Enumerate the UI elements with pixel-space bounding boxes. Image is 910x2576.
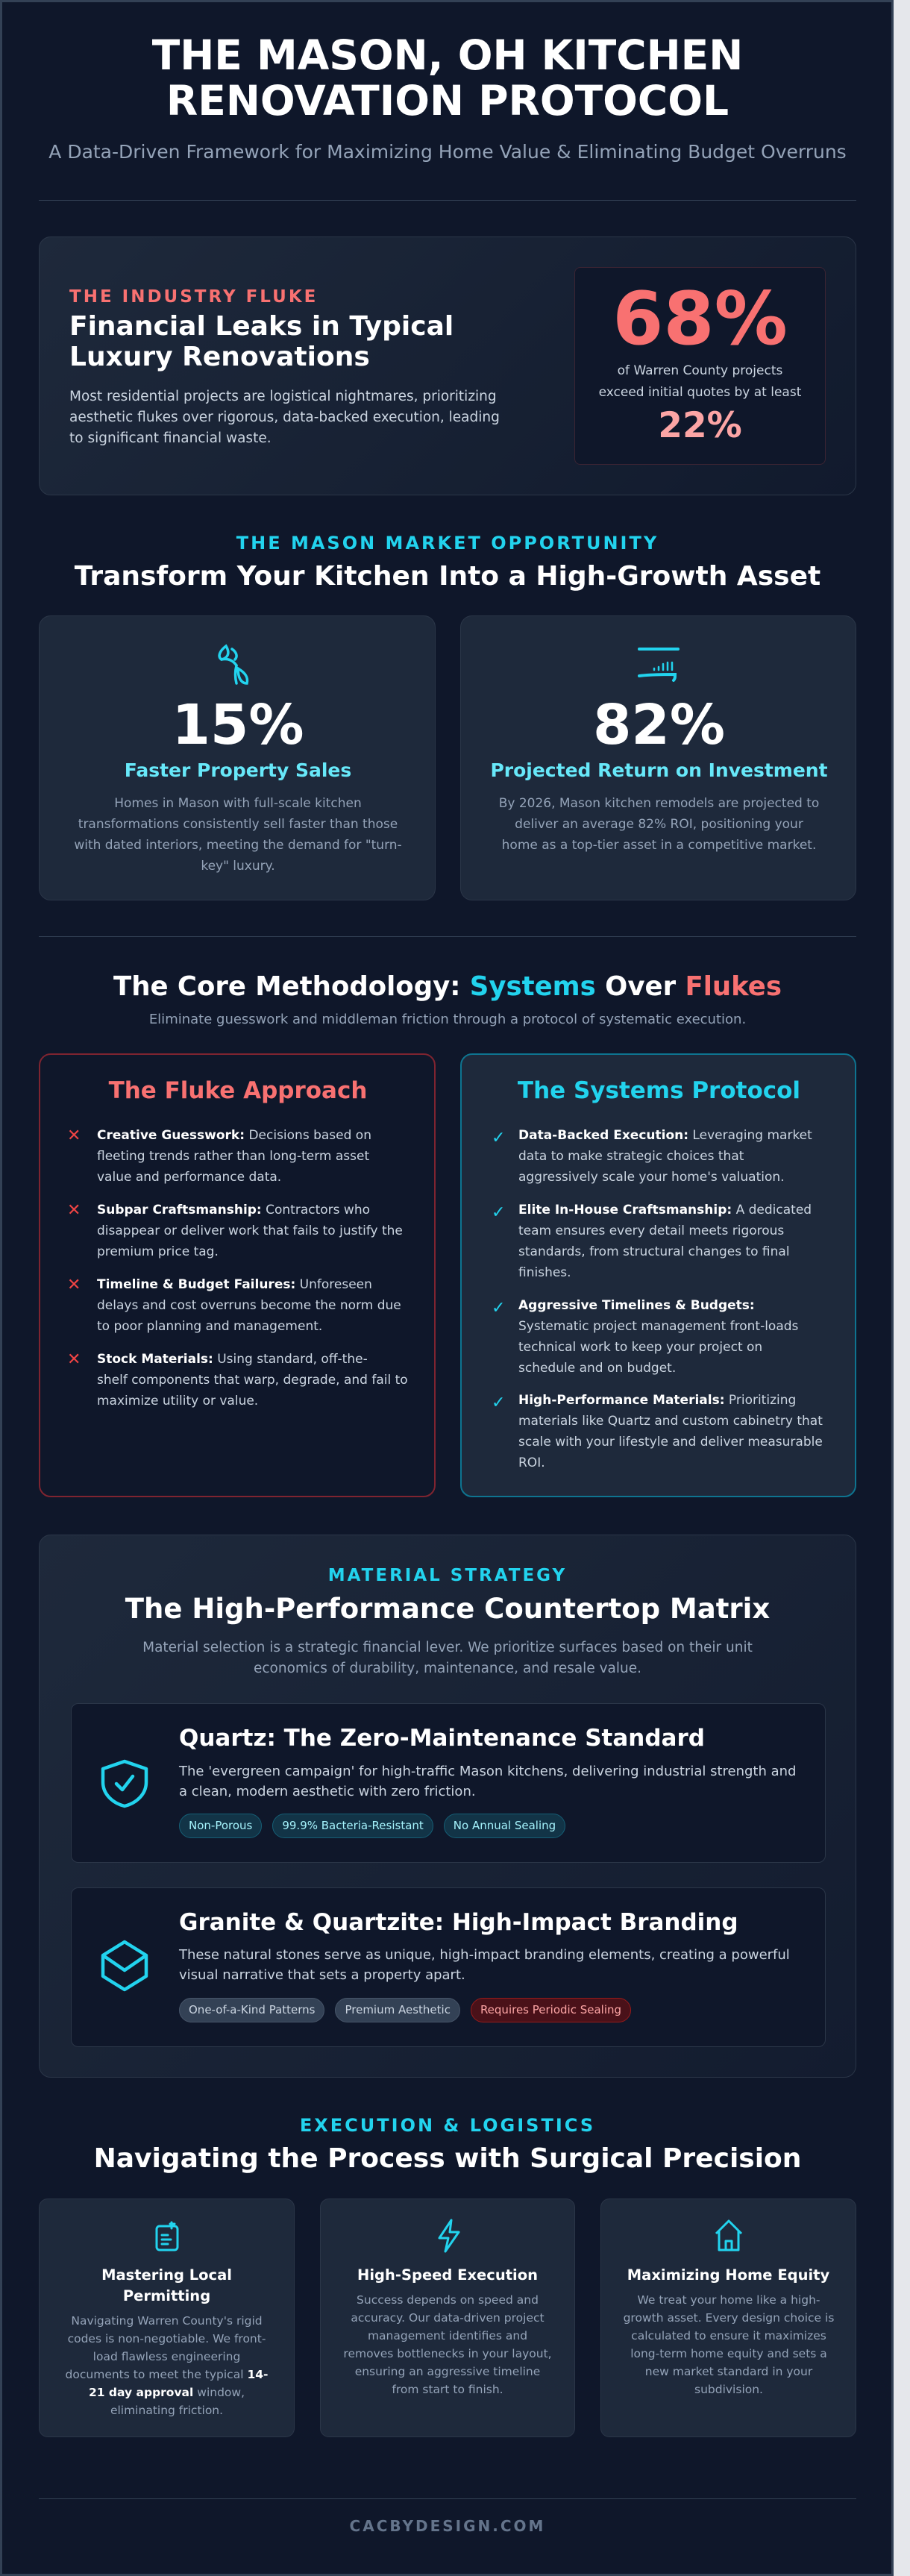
panel: systems protocol bbox=[460, 1053, 856, 1497]
panel: industry fluke bbox=[39, 236, 856, 495]
item: stock materials: shelf components that warp, degrade, and fail to maximize utility or value. bbox=[97, 1373, 408, 1408]
card: permitting bbox=[39, 2199, 295, 2437]
item: data-backed: Data-Backed Execution: Leveraging market data to make strategic choices that aggressively scale your home's valuation. bbox=[518, 1128, 812, 1185]
icon: gem box bbox=[101, 1940, 148, 1992]
description: home as a top-tier asset in a competitive market. bbox=[502, 838, 816, 853]
description: The 'evergreen campaign' for high-traffic Mason kitchens, delivering industrial strength and a clean, modern aesthetic with zero friction. bbox=[179, 1764, 796, 1799]
item: stock materials: ✕ bbox=[67, 1350, 81, 1369]
description: Success depends on speed and accuracy. Our data-driven project management identifies and removes bottlenecks in your layout, ensuring an aggressive timeline from start to finish. bbox=[343, 2293, 552, 2396]
item: creative guesswork: Creative Guesswork: Decisions based on fleeting trends rather than long-term asset value and performance data. bbox=[97, 1128, 371, 1185]
footer: CACBYDESIGN.COM bbox=[350, 2517, 545, 2535]
subtitle: methodology: Eliminate guesswork and middleman friction through a protocol of systematic execution. bbox=[149, 1012, 746, 1027]
description: Homes in Mason with full-scale kitchen transformations consistently sell faster than those with dated interiors, meeting the demand for "turn-key" luxury. bbox=[74, 796, 402, 874]
eyebrow: MATERIAL STRATEGY bbox=[328, 1566, 567, 1585]
stat: 82%: 82% bbox=[593, 693, 725, 757]
heading: financial leaks: Luxury Renovations bbox=[69, 342, 370, 372]
item: creative guesswork: ✕ bbox=[67, 1126, 81, 1145]
tags bbox=[179, 1998, 631, 2022]
item: materials: High-Performance Materials: Prioritizing materials like Quartz and custom cabinetry that scale with your lifestyle and deliver measurable ROI. bbox=[518, 1393, 823, 1470]
label: Faster Property Sales bbox=[125, 759, 351, 781]
item: subpar craftsmanship: Subpar Craftsmanship: Contractors who disappear or deliver work that fails to justify the premium price tag. bbox=[97, 1203, 403, 1259]
icon: leaves bbox=[218, 645, 249, 685]
icon: house bbox=[715, 2219, 742, 2251]
heading: navigating: Navigating the Process with Surgical Precision bbox=[94, 2143, 801, 2174]
card: home equity bbox=[600, 2199, 856, 2437]
icon: shield bbox=[101, 1759, 148, 1808]
eyebrow: execution: EXECUTION & LOGISTICS bbox=[300, 2115, 595, 2136]
heading: The High-Performance Countertop Matrix bbox=[125, 1593, 770, 1625]
heading: financial leaks bbox=[69, 311, 454, 372]
item: stock materials: Stock Materials: Using standard, off-the- bbox=[97, 1352, 368, 1367]
title: High-Speed Execution bbox=[357, 2266, 538, 2284]
item: elite craftsmanship: ✓ bbox=[492, 1203, 505, 1222]
stat box: 68%: of Warren County projects bbox=[618, 363, 782, 378]
tags: Premium Aesthetic bbox=[345, 2003, 451, 2016]
item: elite craftsmanship: Elite In-House Craftsmanship: A dedicated team ensures every detail meets rigorous standards, from structural changes to final finishes. bbox=[518, 1203, 812, 1280]
title: RENOVATION PROTOCOL bbox=[166, 77, 729, 125]
heading: core methodology: The Core Methodology: Systems Over Flukes bbox=[113, 971, 782, 1002]
icon: clipboard bbox=[155, 2222, 179, 2251]
tags: One-of-a-Kind Patterns bbox=[189, 2003, 315, 2016]
heading: financial leaks: Financial Leaks in Typical bbox=[69, 311, 454, 342]
heading: transform: Transform Your Kitchen Into a High-Growth Asset bbox=[75, 561, 820, 592]
label: Projected Return on Investment bbox=[490, 759, 828, 781]
title: THE MASON, OH KITCHEN bbox=[152, 31, 743, 79]
item: data-backed: ✓ bbox=[492, 1129, 505, 1147]
icon: lightning bbox=[438, 2219, 460, 2253]
title: Mastering Local bbox=[101, 2266, 232, 2284]
heading: The Fluke Approach bbox=[109, 1077, 367, 1104]
body text: Most residential projects are logistical nightmares, prioritizing aesthetic flukes over rigorous, data-backed execution, leading to significant financial waste. bbox=[69, 389, 500, 446]
card: quartz bbox=[71, 1703, 826, 1863]
stat: 15%: 15% bbox=[172, 693, 304, 757]
icon: chart bbox=[638, 648, 680, 682]
description: Navigating Warren County's rigid codes is non-negotiable. We front-load flawless engineering documents to meet the typical 14-21 day approval window, eliminating friction. bbox=[66, 2314, 268, 2417]
stat box: 68%: exceed initial quotes by at least bbox=[599, 385, 801, 400]
tags bbox=[179, 1814, 565, 1838]
tags: No Annual Sealing bbox=[454, 1819, 556, 1832]
item: materials: ✓ bbox=[492, 1394, 505, 1412]
stat box: 68%: 22% bbox=[658, 405, 742, 446]
tags: 99.9% Bacteria-Resistant bbox=[282, 1819, 424, 1832]
title: Permitting bbox=[123, 2287, 210, 2304]
stat box: 68%: 68% bbox=[612, 277, 788, 362]
panel: material strategy bbox=[39, 1535, 856, 2078]
title bbox=[152, 31, 743, 125]
card: granite bbox=[71, 1887, 826, 2047]
eyebrow: market opportunity: THE MASON MARKET OPPORTUNITY bbox=[236, 533, 659, 554]
item: stock materials bbox=[67, 1350, 408, 1408]
item: subpar craftsmanship: ✕ bbox=[67, 1201, 81, 1220]
item: timeline failures: ✕ bbox=[67, 1276, 81, 1294]
description: We treat your home like a high-growth asset. Every design choice is calculated to ensure it maximizes long-term home equity and sets a new market standard in your subdivision. bbox=[624, 2293, 834, 2396]
title bbox=[101, 2266, 232, 2304]
heading: The Systems Protocol bbox=[518, 1077, 800, 1104]
card: 15% bbox=[39, 615, 436, 900]
description bbox=[499, 796, 819, 853]
title: Maximizing Home Equity bbox=[627, 2266, 829, 2284]
card: 82% bbox=[460, 615, 856, 900]
title: Granite & Quartzite: High-Impact Branding bbox=[179, 1909, 738, 1936]
title: Quartz: The Zero-Maintenance Standard bbox=[179, 1725, 705, 1752]
item: timelines: Aggressive Timelines & Budgets: Systematic project management front-loads technical work to keep your project on schedule and on budget. bbox=[518, 1298, 798, 1376]
panel: fluke approach bbox=[39, 1053, 436, 1497]
description: By 2026, Mason kitchen remodels are projected to deliver an average 82% ROI, positioning your bbox=[499, 796, 819, 832]
eyebrow: the industry fluke: THE INDUSTRY FLUKE bbox=[69, 287, 318, 307]
tags: Non-Porous bbox=[189, 1819, 252, 1832]
description: Material selection is a strategic financial lever. We prioritize surfaces based on their unit economics of durability, maintenance, and resale value. bbox=[142, 1640, 753, 1676]
tags: Requires Periodic Sealing bbox=[480, 2003, 621, 2016]
description: These natural stones serve as unique, high-impact branding elements, creating a powerful visual narrative that sets a property apart. bbox=[179, 1947, 790, 1983]
stat box: 68% bbox=[574, 267, 826, 465]
item: timeline failures: Timeline & Budget Failures: Unforeseen delays and cost overruns become the norm due to poor planning and management. bbox=[97, 1277, 401, 1334]
subtitle: A Data-Driven Framework for Maximizing Home Value & Eliminating Budget Overruns bbox=[48, 141, 847, 163]
item: timelines: ✓ bbox=[492, 1299, 505, 1317]
card: high-speed bbox=[320, 2199, 575, 2437]
